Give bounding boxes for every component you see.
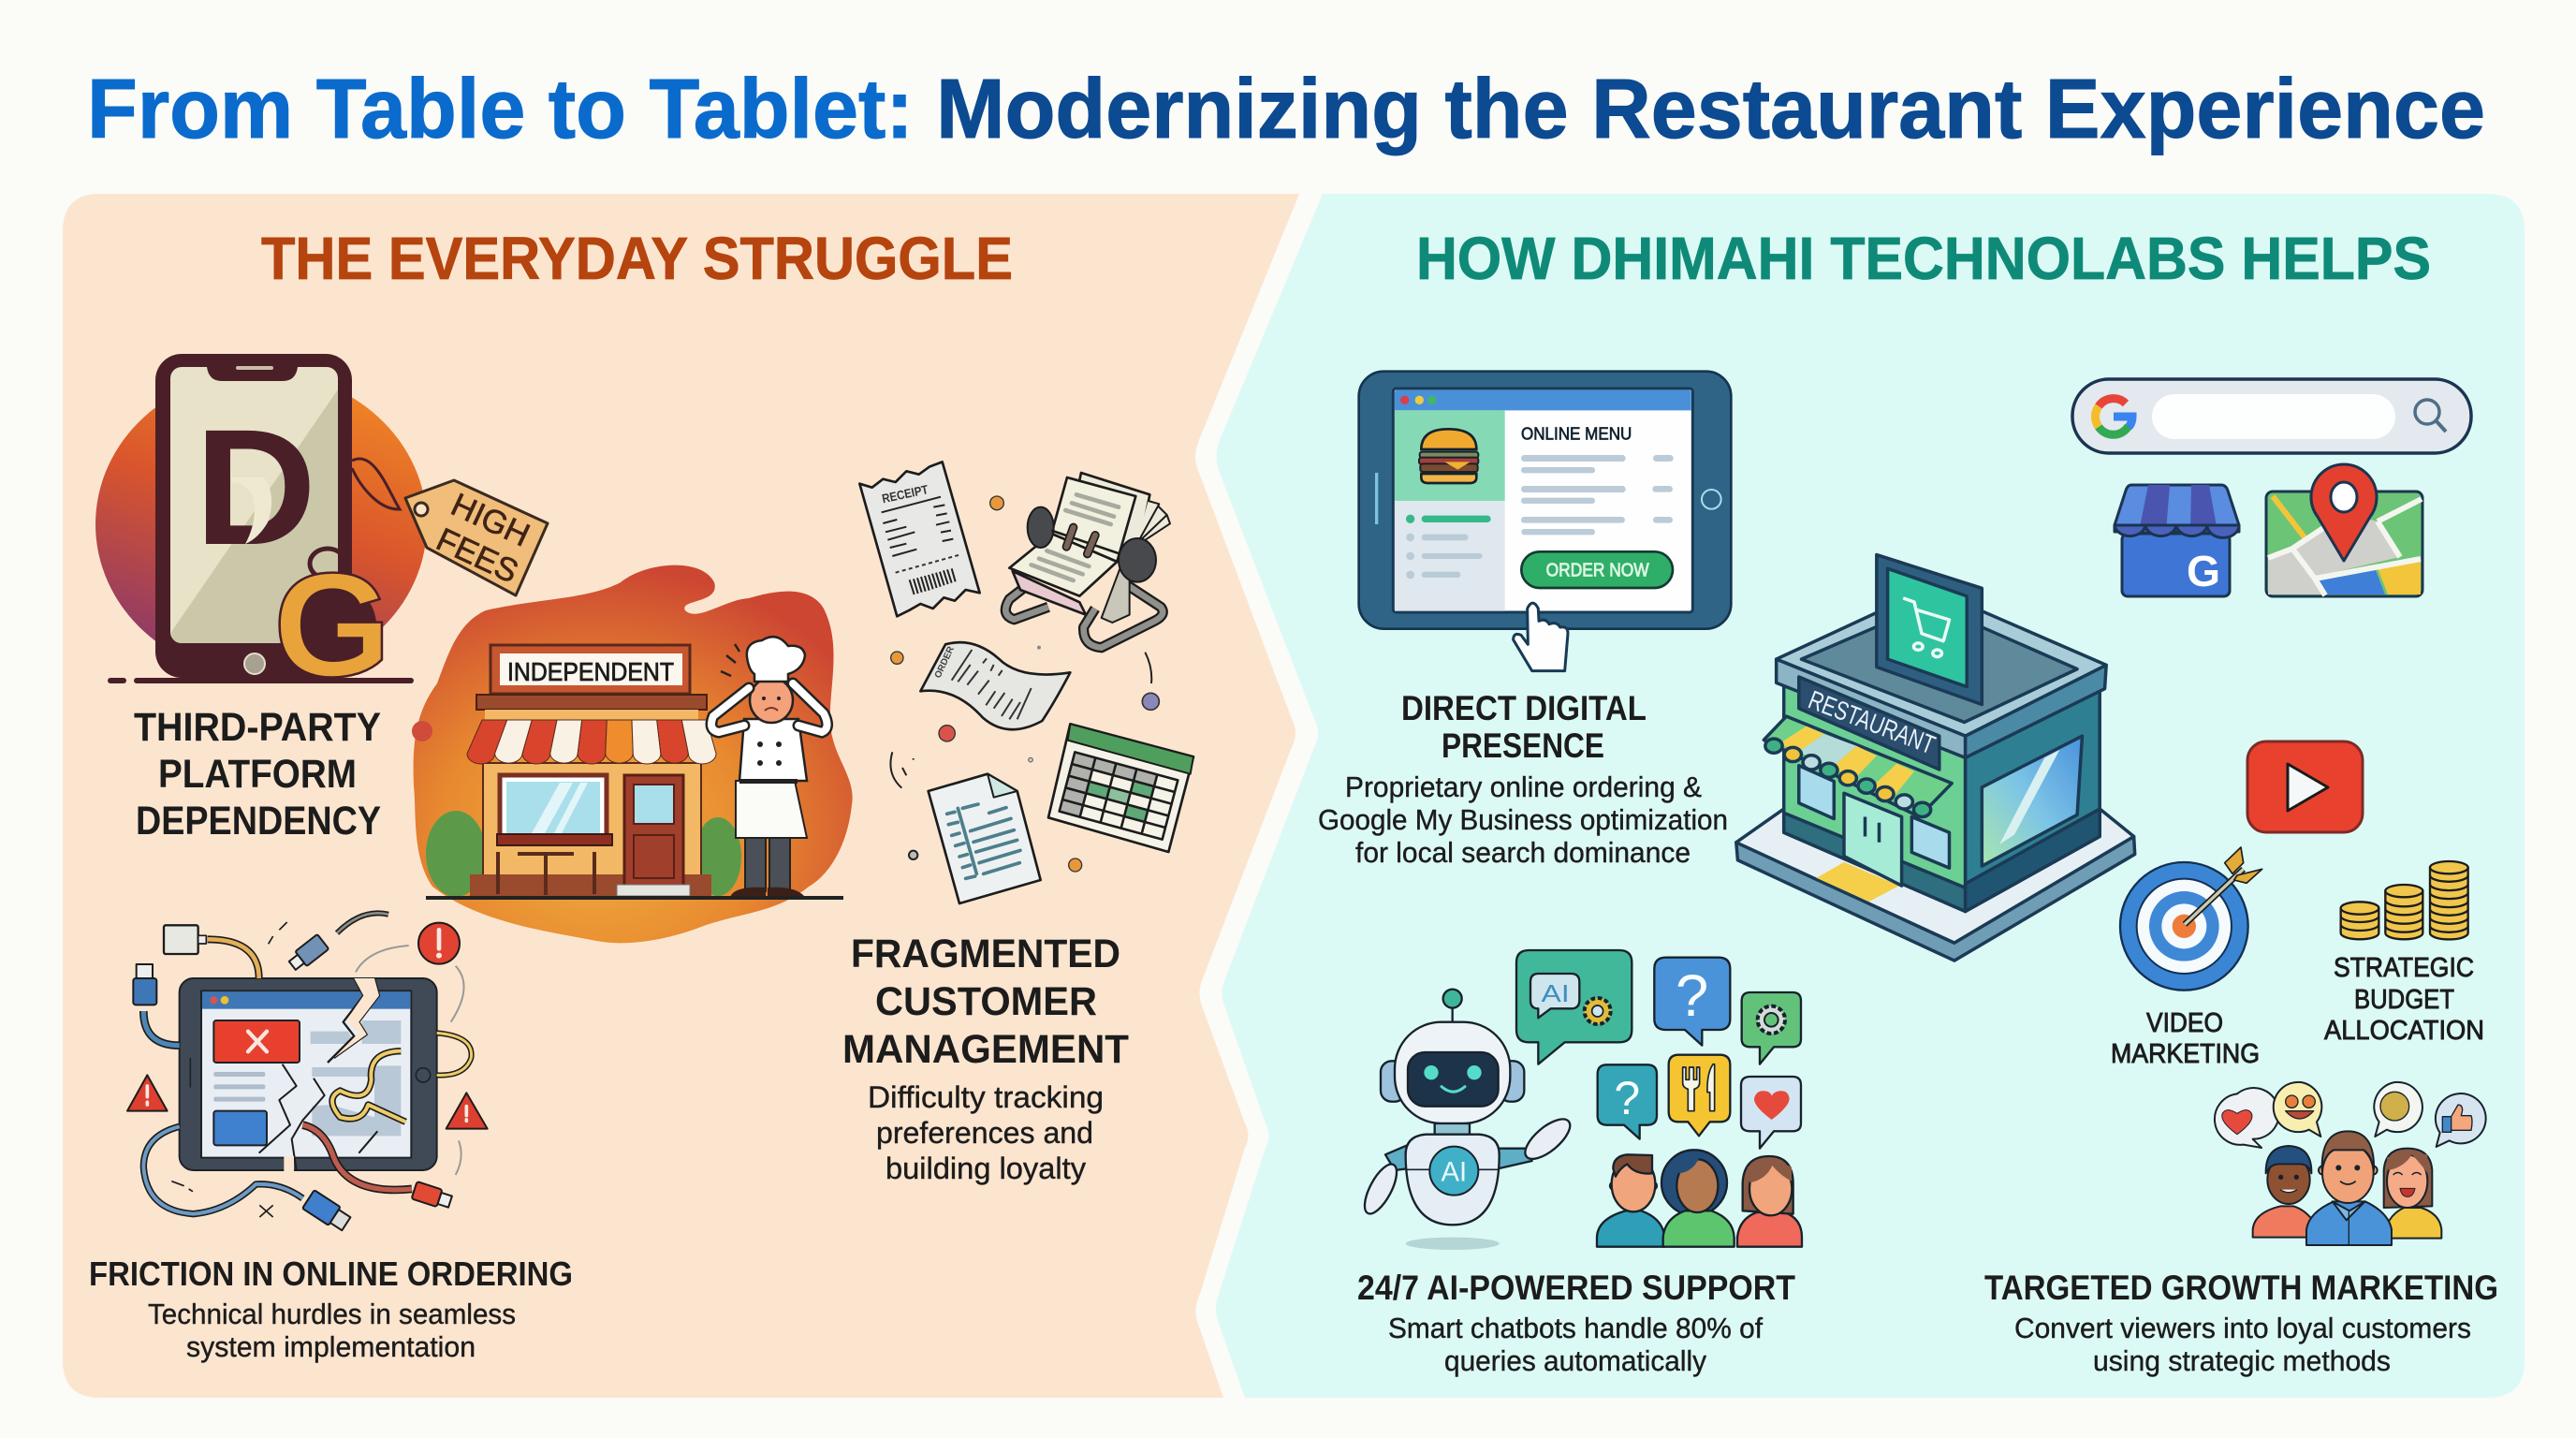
label: fragmented customer management: Difficulty tracking (868, 1080, 1104, 1114)
label: direct digital presence: Google My Business optimization (1318, 803, 1728, 836)
heading: how dhimahi technolabs helps: HOW DHIMAHI TECHNOLABS HELPS (1416, 225, 2431, 292)
label: direct digital presence: Proprietary online ordering & (1345, 770, 1702, 803)
label: third-party platform dependency: THIRD-PARTY (134, 705, 381, 750)
label: 24/7 ai-powered support (1357, 1269, 1795, 1377)
icon: scattered paper records (859, 462, 1193, 903)
illustration: happy customers with reaction bubbles (2215, 1082, 2486, 1245)
label: targeted growth marketing: TARGETED GROWTH MARKETING (1984, 1269, 2498, 1307)
label: targeted growth marketing (1984, 1269, 2498, 1377)
label: direct digital presence: PRESENCE (1442, 726, 1604, 765)
chat bubble: question (1654, 958, 1730, 1046)
label: strategic budget allocation: ALLOCATION (2324, 1016, 2484, 1046)
icon: tablet with online menu: ORDER NOW (1546, 561, 1649, 581)
illustration: ai robot with customer chat bubbles (1358, 950, 1802, 1250)
label: direct digital presence: for local search dominance (1355, 836, 1690, 869)
icon: phone with high fees tag (95, 354, 548, 708)
chat bubble: question: ? (1676, 963, 1708, 1029)
label: 24/7 ai-powered support: Smart chatbots handle 80% of (1388, 1312, 1763, 1344)
illustration: independent restaurant with stressed chef (412, 565, 853, 943)
label: direct digital presence (1318, 689, 1728, 869)
spreadsheet (1048, 724, 1193, 852)
illustration: independent restaurant with stressed chef: INDEPENDENT (507, 657, 674, 686)
panel: how dhimahi technolabs helps (1216, 194, 2525, 1398)
icon: target and coin stacks with labels (2111, 847, 2484, 1069)
panel background: struggle (63, 194, 1299, 1398)
icon: isometric restaurant with tablet on roof (1736, 555, 2135, 961)
coin stacks (2341, 861, 2468, 939)
panel background: solutions (1216, 194, 2525, 1398)
chat bubble: question two (1598, 1064, 1657, 1139)
label: strategic budget allocation: BUDGET (2354, 985, 2454, 1015)
label: video marketing (2111, 1008, 2260, 1069)
label: 24/7 ai-powered support: queries automatically (1444, 1344, 1706, 1377)
label: third-party platform dependency: DEPENDENCY (136, 799, 381, 844)
icon: tablet with online menu (1359, 372, 1731, 671)
label: direct digital presence: DIRECT DIGITAL (1401, 689, 1647, 727)
label: friction in online ordering (89, 1255, 573, 1363)
receipt: RECEIPT (881, 482, 929, 506)
icon: google my business storefront (2115, 485, 2239, 596)
icon: map with location pin (2266, 464, 2422, 596)
label: targeted growth marketing: using strategic methods (2093, 1344, 2391, 1377)
label: strategic budget allocation: STRATEGIC (2334, 953, 2474, 983)
panel: the everyday struggle (63, 194, 1299, 1398)
label: friction in online ordering: system implementation (186, 1330, 476, 1363)
icon: broken tablet with tangled cables (127, 913, 488, 1233)
label: video marketing: MARKETING (2111, 1039, 2260, 1069)
wavy order paper (920, 642, 1070, 729)
robot (1358, 990, 1576, 1250)
label: fragmented customer management (842, 932, 1129, 1185)
receipt (859, 462, 980, 616)
label: fragmented customer management: FRAGMENTED (851, 932, 1120, 976)
chat bubble: ai: AI (1542, 979, 1570, 1007)
rolodex (1005, 473, 1170, 648)
chat bubble: fork and knife (1669, 1055, 1730, 1136)
icon: phone with high fees tag: D (195, 396, 316, 580)
label: fragmented customer management: building loyalty (886, 1152, 1086, 1185)
icon: isometric restaurant with tablet on roof: RESTAURANT (1805, 685, 1939, 759)
chat bubble: gear (1742, 992, 1801, 1064)
label: fragmented customer management: CUSTOMER (875, 979, 1097, 1024)
target with arrow (2120, 847, 2262, 990)
icon: google my business storefront: G (2187, 547, 2220, 595)
document (929, 774, 1041, 903)
label: third-party platform dependency (134, 705, 381, 844)
icon: tablet with online menu: ONLINE MENU (1521, 423, 1632, 443)
icon: google search bar (2072, 379, 2471, 453)
chat bubble: ai (1516, 950, 1632, 1064)
chat bubble: heart (1741, 1077, 1801, 1149)
label: 24/7 ai-powered support: 24/7 AI-POWERED SUPPORT (1357, 1269, 1795, 1307)
label: fragmented customer management: preferences and (876, 1116, 1093, 1150)
icon: video play button (2247, 741, 2363, 832)
chat bubble: question two: ? (1614, 1072, 1640, 1124)
icon: phone with high fees tag: HIGH (446, 486, 535, 554)
title: From Table to Tablet: Modernizing the Restaurant Experience (87, 63, 2485, 156)
label: third-party platform dependency: PLATFORM (158, 752, 357, 797)
wavy order paper: ORDER (933, 645, 957, 680)
label: targeted growth marketing: Convert viewers into loyal customers (2014, 1312, 2471, 1344)
icon: phone with high fees tag: G (273, 543, 391, 708)
label: video marketing: VIDEO (2146, 1008, 2223, 1038)
robot: AI (1441, 1157, 1467, 1188)
heading: the everyday struggle: THE EVERYDAY STRUGGLE (261, 225, 1013, 292)
icon: phone with high fees tag: FEES (431, 521, 524, 591)
customers (1597, 1150, 1802, 1247)
label: fragmented customer management: MANAGEMENT (842, 1027, 1129, 1072)
label: friction in online ordering: FRICTION IN ONLINE ORDERING (89, 1255, 573, 1293)
label: strategic budget allocation (2324, 953, 2484, 1046)
label: friction in online ordering: Technical hurdles in seamless (148, 1298, 516, 1330)
